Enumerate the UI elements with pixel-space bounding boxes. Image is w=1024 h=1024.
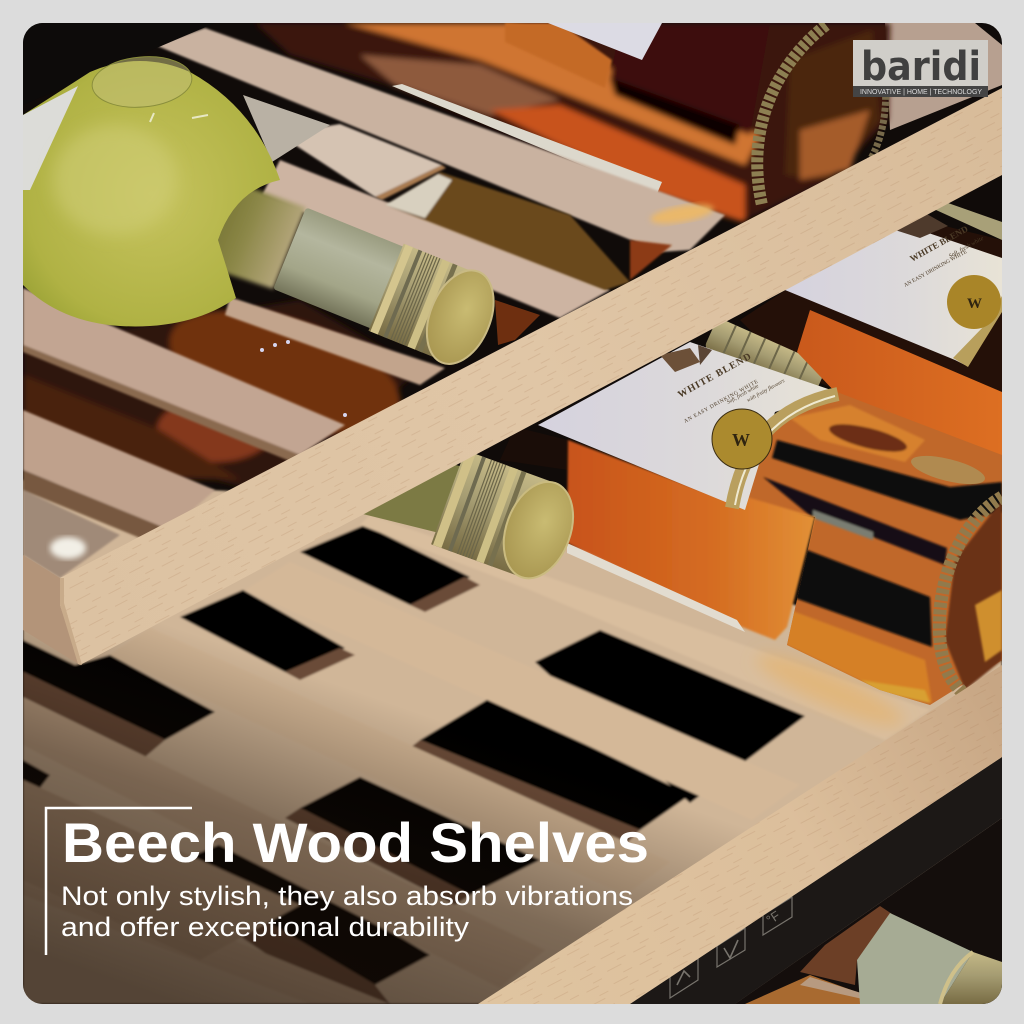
bottle body	[23, 61, 280, 326]
description: Not only stylish, they also absorb vibrations	[61, 881, 633, 911]
sliver between rail and cap	[495, 300, 540, 345]
label behind green bottle	[243, 95, 330, 162]
big bottle label	[538, 342, 838, 510]
inner base	[945, 500, 1002, 690]
bottle label reflection	[23, 86, 78, 190]
amber bottle under the green bottle	[23, 299, 408, 487]
bottle glass	[255, 23, 890, 222]
big bottle label: W	[732, 430, 750, 450]
main front rail	[23, 88, 1002, 665]
top left black edge	[23, 23, 206, 48]
gold ring of the base	[939, 497, 1002, 692]
back label strip	[567, 543, 745, 632]
lower shelf wood	[23, 480, 1002, 1004]
dark glass	[740, 226, 1002, 392]
big bottle glass	[740, 385, 1005, 710]
label emblem	[895, 213, 948, 238]
label text: with fruity flavours	[746, 377, 786, 404]
label text: WHITE BLEND	[908, 223, 970, 264]
label text: WHITE BLEND	[676, 351, 754, 401]
neck	[218, 188, 306, 292]
seal	[712, 409, 772, 469]
upper slats over the bottle	[155, 28, 725, 318]
bottle lip	[92, 56, 192, 108]
shelf glow spot	[50, 537, 86, 559]
label	[785, 225, 1002, 365]
sparkling gold cluster	[908, 450, 988, 490]
middle dark bottle	[385, 172, 672, 290]
label text: Soft, fresh white	[948, 235, 985, 260]
amber glow on shelf	[756, 651, 904, 730]
bottom right bottle	[735, 818, 1002, 1004]
orange contents	[797, 310, 1002, 456]
bottle highlight	[53, 125, 177, 235]
right upper bottle: W	[967, 296, 982, 312]
control panel strip	[630, 757, 1002, 1004]
back label strip	[392, 84, 662, 196]
label text: Soft, fresh white	[726, 382, 760, 406]
slat reflection glow	[649, 201, 715, 227]
heading: Beech Wood Shelves	[62, 811, 649, 874]
top right slat behind the logo	[885, 23, 1002, 130]
closure	[218, 188, 495, 365]
big bottle orange contents	[567, 440, 815, 640]
diagonal slats	[360, 515, 930, 740]
label panels	[505, 23, 612, 88]
second closure	[353, 422, 586, 588]
glass reflection stripes	[763, 405, 1002, 703]
gold ring of the base	[757, 25, 826, 205]
label text	[903, 223, 985, 289]
label text: AN EASY DRINKING WHITE	[903, 249, 969, 289]
wood slats left and upper	[23, 124, 446, 578]
logo: INNOVATIVE | HOME | TECHNOLOGY	[860, 89, 982, 96]
foil threads	[936, 203, 1002, 240]
label text: AN EASY DRINKING WHITE	[683, 379, 760, 425]
top bottle	[255, 23, 890, 222]
green bottle	[23, 53, 506, 375]
title block	[46, 808, 649, 955]
big bottle neck shadow	[500, 427, 568, 470]
bottle sparkle	[150, 113, 208, 122]
gold band	[732, 394, 838, 508]
amber bottle highlights	[260, 340, 347, 417]
logo: baridi	[861, 44, 981, 90]
gold band	[953, 296, 1002, 367]
black gaps between slats	[23, 525, 805, 985]
lower shelf shading	[23, 630, 839, 1004]
touch buttons	[670, 897, 792, 998]
foil neck	[706, 321, 822, 386]
corner bracket	[46, 808, 192, 955]
front bottom rail	[478, 665, 1002, 1004]
description: and offer exceptional durability	[61, 912, 470, 942]
label emblem	[660, 348, 700, 372]
label text	[676, 351, 786, 425]
temperature key: °F	[763, 908, 783, 928]
seal	[947, 275, 1001, 329]
right upper bottle	[704, 203, 1002, 460]
dark undersides	[23, 577, 640, 1004]
